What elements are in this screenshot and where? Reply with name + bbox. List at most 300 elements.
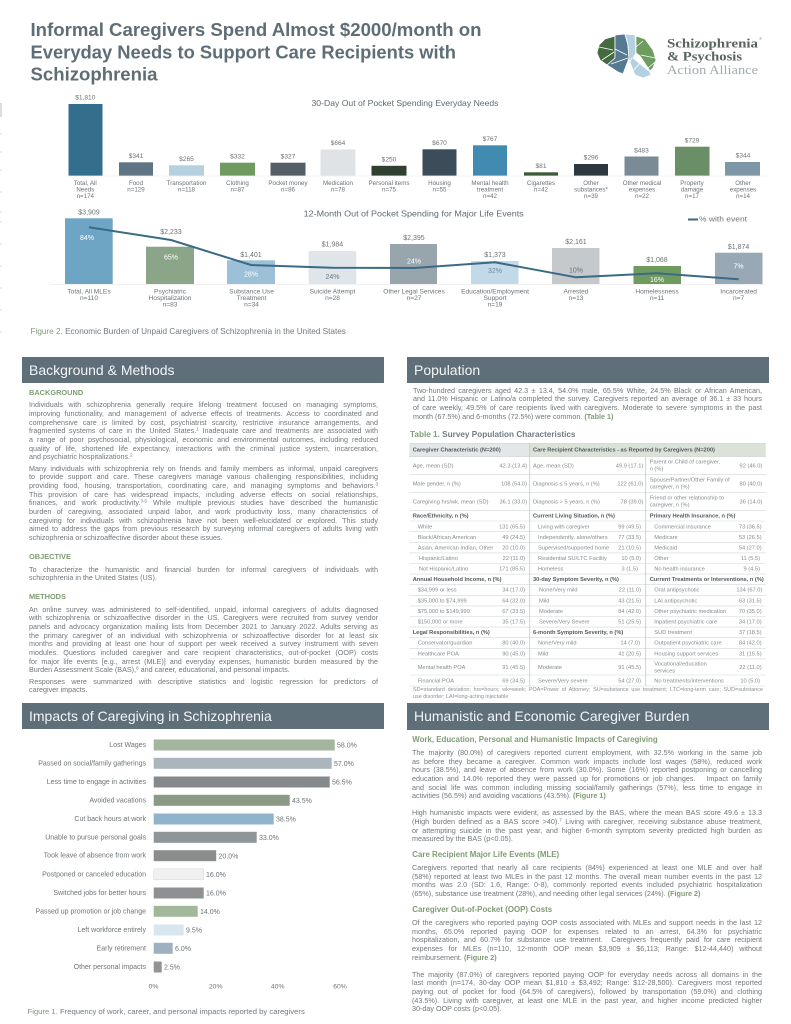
- text: OOP costs for everyday needs: [412, 970, 762, 1013]
- table column: relationship, insurance and treatments: caregiver, n (%): [650, 502, 690, 508]
- bar chart: 30-day out of pocket spending: $341: [129, 153, 144, 160]
- table column: relationship, insurance and treatments: 37 (18.5): [739, 630, 762, 636]
- table column: relationship, insurance and treatments: 80 (40.0): [740, 482, 762, 488]
- table column: relationship, insurance and treatments: Parent or Child of caregiver,: [650, 460, 721, 466]
- bar chart: 30-day out of pocket spending: $327: [281, 154, 296, 160]
- text: objective: schizophrenia in the United States (US).: [29, 573, 157, 582]
- text: population summary: of care weekly, 49.5% of care recipients lived with caregivers. Moderate to severe symptoms in the past: [413, 403, 762, 412]
- table column: caregiver characteristics: 35 (17.5): [502, 619, 525, 625]
- bar chart: 30-day out of pocket spending: Medication: [323, 180, 354, 187]
- text: OOP costs for everyday needs: last month (n=174, 30-day OOP mean $1,810 ± $3,492; Range: $12-28,500). Caregivers most reported: [412, 978, 762, 987]
- table column: care recipient characteristics: 30-day Symptom Severity, n (%): [533, 577, 619, 583]
- text: humanistic impacts: or attempting suicide in the past year, and higher 6-month symptom severity predicted high burden as: [412, 826, 762, 835]
- table column: care recipient characteristics: 10 (5.0): [621, 556, 641, 562]
- text: methods paragraph 1: An online survey was administered to self-identified, unpaid, informal caregivers of adults diagnosed: [29, 605, 378, 614]
- text: population summary: month (67.5%) and 6-months (72.5%) were common. (Table 1): [413, 412, 613, 421]
- bar chart: 30-day out of pocket spending: $670: [432, 140, 447, 147]
- text: methods paragraph 1: [29, 605, 378, 674]
- combo chart: 12-month out of pocket spending: 32%: [488, 268, 502, 275]
- text: population summary: and 11.0% Hispanic or Latino/a completed the survey. Caregivers reported an average of 36.1 ± 33 hours: [413, 394, 762, 403]
- bar chart: impacts of caregiving: 14.0%: [200, 909, 220, 916]
- table column: relationship, insurance and treatments: Outpatient psychiatric care: [654, 641, 722, 647]
- table column: care recipient characteristics: Residential SU/LTC Facility: [538, 556, 607, 562]
- table column: caregiver characteristics: 90 (45.0): [502, 651, 525, 657]
- table column: relationship, insurance and treatments: Vocational/education: [654, 662, 707, 668]
- heading: care recipient major life events: Care Recipient Major Life Events (MLE): [412, 850, 559, 859]
- combo chart: 12-month out of pocket spending: [50, 208, 765, 309]
- table column: caregiver characteristics: 131 (65.5): [499, 524, 525, 530]
- text: OOP costs for everyday needs: The majority (87.0%) of caregivers reported paying OOP for everyday needs across all domains in the: [412, 970, 762, 979]
- bar chart: 30-day out of pocket spending: n=75: [382, 187, 397, 194]
- combo chart: 12-month out of pocket spending: $3,909: [78, 210, 100, 216]
- chart title: 12-Month Out of Pocket Spending for Major Life Events: [304, 208, 524, 218]
- bar chart: impacts of caregiving: Lost Wages: [109, 742, 146, 749]
- text: humanistic impacts: measured by the BAS (p<0.05).: [412, 834, 513, 843]
- bar chart: impacts of caregiving: Avoided vacations: [89, 797, 146, 804]
- combo chart: 12-month out of pocket spending: Treatment: [237, 295, 267, 302]
- bar chart: 30-day out of pocket spending: Pocket money: [268, 180, 309, 187]
- table column: care recipient characteristics: Moderate: [539, 609, 563, 615]
- table column: care recipient characteristics: Diagnosis ≤ 5 years, n (%): [533, 482, 600, 488]
- bar chart: 30-day out of pocket spending: Other: [583, 180, 599, 187]
- bar chart: impacts of caregiving: Passed on social/family gatherings: [38, 760, 146, 767]
- table column: caregiver characteristics: 42.3 (13.4): [499, 464, 527, 470]
- panel heading: Impacts of Caregiving: Impacts of Caregiving in Schizophrenia: [29, 708, 272, 724]
- bar chart: 30-day out of pocket spending: n=17: [685, 193, 700, 200]
- table column: care recipient characteristics: Severe/Very Severe: [539, 619, 590, 625]
- table column: relationship, insurance and treatments: 54 (27.0): [739, 545, 762, 551]
- logo: Schizophrenia & Psychosis Action Alliance: Action Alliance: [667, 62, 758, 77]
- legend: [688, 214, 747, 224]
- table column: caregiver characteristics: $75,000 to $149,999: [418, 609, 470, 615]
- bar chart: 30-day out of pocket spending: damage: [681, 187, 704, 194]
- bar chart: 30-day out of pocket spending: Total, All: [74, 180, 97, 187]
- text: humanistic impacts: [412, 808, 762, 843]
- table column: caregiver characteristics: Legal Responsibilities, n (%): [413, 630, 490, 636]
- table column: relationship, insurance and treatments: 134 (67.0): [736, 588, 762, 594]
- text: work impacts: and social life was common including missing social/family gatherings (57%), less time to engage in: [412, 783, 762, 792]
- table column: caregiver characteristics: 80 (40.0): [502, 641, 525, 647]
- combo chart: 12-month out of pocket spending: Education/Employment: [461, 288, 529, 295]
- bar chart: 30-day out of pocket spending: $767: [483, 136, 498, 143]
- combo chart: 12-month out of pocket spending: $1,373: [484, 252, 506, 259]
- table column: relationship, insurance and treatments: 53 (26.5): [739, 535, 762, 541]
- bar chart: impacts of caregiving: 6.0%: [175, 946, 191, 953]
- bar chart: impacts of caregiving: 57.0%: [334, 761, 354, 768]
- bar chart: impacts of caregiving: Left workforce entirely: [78, 927, 146, 934]
- table column: caregiver characteristics: 36.1 (33.0): [499, 499, 527, 505]
- combo chart: 12-month out of pocket spending: Substance Use: [229, 288, 274, 295]
- table column: relationship, insurance and treatments: caregiver, n (%): [650, 484, 690, 490]
- bar chart: 30-day out of pocket spending: $729: [685, 138, 700, 144]
- bar chart: 30-day out of pocket spending: n=129: [127, 187, 145, 194]
- text: background paragraph 1: Individuals with schizophrenia generally require lifelong treatment focused on managing symptoms,: [29, 400, 378, 409]
- text: objective: To characterize the humanistic and financial burden for informal caregivers of individuals with: [29, 565, 378, 574]
- text: background paragraph 2: burden of caregiving, associated unpaid labor, and work productivity loss, many characteristics of: [29, 507, 378, 516]
- table column: care recipient characteristics: 78 (39.0): [621, 499, 643, 505]
- text: background paragraph 2: schizophrenia or schizoaffective disorder about these issues.: [29, 533, 223, 542]
- text: methods paragraph 1: months and providing at least one hour of support per week received a survey instrument with seven: [29, 639, 378, 648]
- text: background paragraph 1: and psychiatric hospitalizations.2: [29, 452, 133, 461]
- table column: relationship, insurance and treatments: 84 (42.0): [739, 641, 762, 647]
- text: methods paragraph 1: the primary caregiver of an individual with schizophrenia or schizoaffective disorder for at least six: [29, 631, 378, 640]
- bar chart: impacts of caregiving: [35, 740, 357, 990]
- heading: background: BACKGROUND: [29, 388, 83, 396]
- bar chart: impacts of caregiving: Took leave of absence from work: [44, 853, 146, 860]
- bar chart: impacts of caregiving: 16.0%: [206, 872, 226, 879]
- combo chart: 12-month out of pocket spending: n=110: [80, 295, 98, 302]
- table column: relationship, insurance and treatments: No treatments/interventions: [654, 678, 724, 684]
- bar chart: 30-day out of pocket spending: Food: [129, 180, 144, 187]
- text: major life events: (65%), substance use treatment (28%), and needing other legal services (24%). (Figure 2): [412, 889, 700, 898]
- table column: care recipient characteristics: None/Very mild: [538, 641, 577, 647]
- text: background paragraph 2: Many individuals with schizophrenia rely on friends and family members as informal, unpaid caregivers: [29, 464, 378, 473]
- table column: caregiver characteristics: 67 (33.5): [502, 609, 525, 615]
- table column: caregiver characteristics: Hispanic/Latino: [419, 556, 458, 562]
- bar chart: 30-day out of pocket spending: $250: [382, 156, 397, 164]
- text: work impacts: as before they became a caregiver. Common work impacts include lost wages (58%), reduced work: [412, 757, 762, 766]
- table column: relationship, insurance and treatments: 10 (5.0): [740, 678, 760, 684]
- text: background paragraph 2: This provision of care has widespread impacts, including adverse effects on social relationships,: [29, 490, 378, 499]
- combo chart: 12-month out of pocket spending: Arrested: [564, 288, 589, 295]
- table column: caregiver characteristics: 64 (32.0): [502, 598, 525, 604]
- combo chart: 12-month out of pocket spending: $1,068: [646, 257, 668, 264]
- bar chart: 30-day out of pocket spending: $265: [179, 156, 194, 163]
- text: major life events: (58%) reported at least two MLEs in the past 12 months. The overall mean number events in the past 12: [412, 872, 762, 881]
- text: OOP costs for MLEs: [412, 918, 762, 962]
- table column: care recipient characteristics: Mild: [539, 598, 549, 604]
- table column: relationship, insurance and treatments: 70 (35.0): [739, 609, 762, 615]
- bar chart: 30-day out of pocket spending: n=86: [281, 187, 296, 194]
- table column: caregiver characteristics: Race/Ethnicity, n (%): [413, 514, 469, 520]
- text: population summary: Two-hundred caregivers aged 42.3 ± 13.4, 54.0% male, 65.5% White, 24.5% Black or African American,: [413, 386, 762, 395]
- table column: relationship, insurance and treatments: [650, 460, 764, 684]
- table column: caregiver characteristics: Financial POA: [418, 678, 454, 684]
- table column: care recipient characteristics: Moderate: [538, 665, 562, 671]
- table column: caregiver characteristics: $150,000 or more: [418, 619, 463, 625]
- table column: care recipient characteristics: 43 (21.5): [618, 598, 641, 604]
- text: OOP costs for MLEs: reimbursement. (Figure 2): [412, 953, 497, 962]
- logo: Schizophrenia & Psychosis Action Alliance: & Psychosis: [667, 49, 742, 64]
- axis labels: 0%: [149, 984, 158, 990]
- combo chart: 12-month out of pocket spending: n=34: [244, 302, 259, 309]
- bar chart: 30-day out of pocket spending: $344: [736, 152, 751, 160]
- combo chart: 12-month out of pocket spending: n=13: [569, 295, 584, 302]
- table footnote: [413, 687, 763, 700]
- bar chart: impacts of caregiving: Switched jobs for better hours: [53, 890, 146, 897]
- table column: relationship, insurance and treatments: Friend or other relationship to: [650, 495, 724, 501]
- table column: relationship, insurance and treatments: SUD treatment: [654, 630, 692, 636]
- bar chart: impacts of caregiving: 38.5%: [276, 816, 296, 824]
- axis labels: [149, 984, 347, 990]
- bar chart: 30-day out of pocket spending: $296: [584, 154, 599, 162]
- table column: caregiver characteristics: Healthcare POA: [418, 651, 459, 657]
- combo chart: 12-month out of pocket spending: n=11: [650, 295, 665, 302]
- table column: relationship, insurance and treatments: Current Treatments or Interventions, n (%): [650, 577, 764, 583]
- bar chart: 30-day out of pocket spending: Clothing: [226, 180, 249, 187]
- combo chart: 12-month out of pocket spending: Homelessness: [635, 288, 679, 295]
- table column: caregiver characteristics: 171 (85.5): [499, 566, 525, 572]
- bar chart: impacts of caregiving: Postponed or canceled education: [42, 871, 146, 878]
- text: major life events: Caregivers reported that nearly all care recipients (84%) experienced at least one MLE and over half: [412, 863, 762, 872]
- bar chart: 30-day out of pocket spending: $1,810: [75, 94, 96, 102]
- table column: care recipient characteristics: Independently, alone/others: [538, 535, 608, 541]
- table column: care recipient characteristics: Supervised/supported home: [538, 545, 609, 551]
- table column: caregiver characteristics: Male gender, n (%): [413, 482, 461, 488]
- text: background paragraph 1: [29, 400, 378, 461]
- combo chart: 12-month out of pocket spending: 7%: [734, 264, 744, 270]
- text: methods paragraph 1: with schizophrenia or schizoaffective disorder in the US. Caregivers were recruited from survey vendor: [29, 613, 378, 622]
- table column: relationship, insurance and treatments: No health insurance: [654, 566, 705, 572]
- panel heading: Population: Population: [414, 362, 480, 378]
- bar chart: 30-day out of pocket spending: n=174: [77, 193, 95, 200]
- text: objective: [29, 565, 378, 582]
- table column: care recipient characteristics: Mild: [538, 651, 548, 657]
- table column: relationship, insurance and treatments: Other: [654, 556, 669, 562]
- table column: relationship, insurance and treatments: Medicare: [654, 535, 678, 541]
- combo chart: 12-month out of pocket spending: 24%: [407, 258, 421, 266]
- table column: care recipient characteristics: 14 (7.0): [620, 641, 640, 647]
- combo chart: 12-month out of pocket spending: n=27: [407, 295, 422, 302]
- table: survey population characteristics: [409, 443, 766, 686]
- table column: caregiver characteristics: Black/African American: [418, 535, 476, 541]
- panel heading: Humanistic and Economic Caregiver Burden: Humanistic and Economic Caregiver Burden: [414, 708, 689, 724]
- bar chart: 30-day out of pocket spending: Needs: [76, 187, 94, 194]
- text: work impacts: hours (38.5%), and leave of absence from work (30.0%). Some (16%) reported postponing or cancelling: [412, 765, 762, 774]
- printer crop ticks: [0, 103, 2, 332]
- table column: care recipient characteristics: 54 (27.0): [618, 678, 641, 684]
- chart title: 30-Day Out of Pocket Spending Everyday Needs: [312, 98, 498, 108]
- table column: care recipient characteristics: Living with caregiver: [538, 524, 590, 530]
- bar chart: impacts of caregiving: 16.0%: [206, 890, 226, 898]
- text: methods paragraph 1: modules. Questions included caregiver and care recipient characteristics, out-of-pocket (OOP) costs: [29, 648, 378, 657]
- panel heading: Background & Methods: Background & Methods: [29, 362, 175, 378]
- combo chart: 12-month out of pocket spending: Suicide Attempt: [310, 288, 356, 295]
- bar chart: 30-day out of pocket spending: substances*: [574, 187, 608, 194]
- combo chart: 12-month out of pocket spending: 16%: [650, 277, 664, 284]
- bar chart: 30-day out of pocket spending: Mental health: [471, 180, 509, 187]
- bar chart: 30-day out of pocket spending: treatment: [477, 187, 503, 194]
- combo chart: 12-month out of pocket spending: n=83: [163, 302, 178, 309]
- text: work impacts: The majority (80.0%) of caregivers reported current employment, with 32.5% working in the same job: [412, 748, 762, 757]
- table column: care recipient characteristics: Age, mean (SD): [533, 464, 574, 470]
- bar chart: 30-day out of pocket spending: Property: [680, 180, 705, 187]
- table column: relationship, insurance and treatments: Spouse/Partner/Other Family of: [650, 478, 730, 484]
- text: OOP costs for everyday needs: (43.5%). Living with caregiver, at least one MLE in the past year, and higher income predicted higher: [412, 996, 762, 1005]
- bar chart: 30-day out of pocket spending: Other medical: [623, 180, 661, 187]
- line: % with event: [89, 227, 739, 279]
- table title: Table 1. Survey Population Characteristics: [410, 430, 575, 439]
- title: Everyday Needs to Support Care Recipients with: [30, 41, 456, 62]
- table column: caregiver characteristics: 108 (54.0): [501, 482, 527, 488]
- table column: care recipient characteristics: None/Very mild: [539, 588, 578, 594]
- bar chart: 30-day out of pocket spending: n=42: [534, 187, 549, 194]
- table column: care recipient characteristics: 77 (33.5): [618, 535, 641, 541]
- combo chart: 12-month out of pocket spending: 28%: [244, 272, 258, 278]
- table column: relationship, insurance and treatments: Commercial insurance: [654, 524, 711, 530]
- text: background paragraph 2: finances, and work productivity.3-5 While multiple previous studies have described the humanistic: [29, 498, 378, 507]
- bar chart: impacts of caregiving: 2.5%: [164, 964, 180, 972]
- bar chart: 30-day out of pocket spending: n=14: [736, 193, 751, 200]
- bar chart: 30-day out of pocket spending: $81: [535, 163, 547, 170]
- bar chart: impacts of caregiving: 33.0%: [259, 835, 279, 842]
- bar chart: 30-day out of pocket spending: n=55: [433, 187, 447, 194]
- bar chart: impacts of caregiving: Early retirement: [97, 945, 146, 952]
- bar chart: impacts of caregiving: Less time to engage in activities: [47, 779, 146, 786]
- text: methods paragraph 1: Burden Assessment Scale (BAS),6 and career, educational, and personal impacts.: [29, 665, 290, 674]
- text: OOP costs for MLEs: Of the caregivers who reported paying OOP costs associated with MLEs and support needs in the last 12: [412, 918, 762, 927]
- table column: caregiver characteristics: $34,999 or less: [418, 588, 457, 594]
- table column: care recipient characteristics: 3 (1.5): [622, 566, 638, 572]
- table column: caregiver characteristics: White: [418, 524, 432, 530]
- text: work impacts: [412, 748, 762, 800]
- panel heading: Impacts of Caregiving: [22, 703, 384, 729]
- combo chart: 12-month out of pocket spending: n=19: [488, 302, 503, 309]
- bar chart: impacts of caregiving: 43.5%: [292, 798, 312, 805]
- table column: care recipient characteristics: [533, 447, 715, 684]
- table column: relationship, insurance and treatments: 36 (14.0): [740, 499, 762, 505]
- table column: care recipient characteristics: 51 (25.5): [618, 619, 641, 625]
- text: methods paragraph 2: caregiver impacts.: [29, 685, 87, 694]
- table column: relationship, insurance and treatments: Other psychiatric medication: [654, 609, 726, 615]
- bar chart: 30-day out of pocket spending: [68, 94, 767, 200]
- bar chart: 30-day out of pocket spending: expenses: [730, 187, 756, 194]
- combo chart: 12-month out of pocket spending: Psychiatric: [154, 288, 187, 295]
- bar chart: 30-day out of pocket spending: Personal items: [369, 180, 409, 187]
- table column: care recipient characteristics: 6-month Symptom Severity, n (%): [533, 630, 623, 636]
- text: background paragraph 1: comprehensive care is limited by cost, psychiatrist scarcity, restrictive insurance arrangements, and: [29, 418, 378, 427]
- text: background paragraph 1: improving functionality, and management of adverse effects of treatments. Access to coordinated and: [29, 409, 378, 418]
- title: Schizophrenia: [30, 64, 158, 84]
- text: background paragraph 1: fragmented systems of care in the United States.1 Inadequate care and treatments are associated with: [29, 426, 378, 435]
- text: methods paragraph 2: [29, 677, 378, 694]
- table column: care recipient characteristics: Severe/Very severe: [538, 678, 588, 684]
- bar chart: impacts of caregiving: 58.0%: [337, 742, 357, 750]
- combo chart: 12-month out of pocket spending: $1,874: [728, 244, 749, 251]
- axis labels: 20%: [209, 984, 223, 990]
- logo: Schizophrenia & Psychosis Action Alliance: ®: [759, 36, 762, 41]
- text: population summary: [413, 386, 762, 421]
- text: methods paragraph 1: panels and advocacy organization mailing lists from December 2021 to January 2022. Adults serving as: [29, 622, 378, 631]
- panel heading: Background & Methods: [22, 357, 384, 383]
- table column: caregiver characteristics: Annual Household Income, n (%): [413, 577, 502, 583]
- bar chart: impacts of caregiving: 56.5%: [332, 780, 352, 786]
- axis labels: 40%: [271, 984, 285, 990]
- bar chart: 30-day out of pocket spending: Cigarettes: [527, 180, 555, 187]
- combo chart: 12-month out of pocket spending: Other Legal Services: [383, 288, 445, 295]
- panel heading: Humanistic and Economic Caregiver Burden: [407, 703, 769, 730]
- combo chart: 12-month out of pocket spending: $2,395: [403, 235, 425, 242]
- text: background paragraph 2: providing food, housing, transportation, coordinating care, and managing symptoms and behaviors.3: [29, 481, 378, 490]
- text: humanistic impacts: (High burden defined as a BAS score >40).7 Living with caregiver, receiving substance abuse treatment,: [412, 817, 762, 826]
- heading: work, education, personal impacts: Work, Education, Personal and Humanistic Impacts of Caregiving: [412, 734, 658, 744]
- table column: care recipient characteristics: 41 (20.5): [618, 651, 641, 657]
- text: OOP costs for MLEs: months, 65.0% reported paying OOP for expenses related to an arrest, 64.3% for psychiatric: [412, 927, 762, 936]
- bar chart: 30-day out of pocket spending: Transportation: [167, 180, 207, 187]
- table column: caregiver characteristics: Conservator/guardian: [418, 641, 472, 647]
- text: major life events: months was 2.0 (SD: 1.6, Range: 0-8), commonly reported events included psychiatric hospitalization: [412, 880, 762, 889]
- table column: caregiver characteristics: 91 (45.5): [502, 665, 525, 671]
- table column: caregiver characteristics: 20 (10.0): [502, 545, 525, 551]
- combo chart: 12-month out of pocket spending: Hospitalization: [149, 295, 192, 302]
- legend: % with event: [699, 214, 747, 224]
- table column: relationship, insurance and treatments: Oral antipsychotic: [654, 588, 700, 594]
- table column: care recipient characteristics: 84 (42.0): [618, 609, 641, 615]
- text: OOP costs for MLEs: expenses for MLEs (n=110, 12-month OOP mean $3,909 ± $6,113; Range: $12-44,440) without: [412, 944, 762, 953]
- text: OOP costs for MLEs: hospitalization, and 60.7% for substance use treatment. Caregivers frequently paid for care recipient: [412, 935, 762, 944]
- table column: caregiver characteristics: Not Hispanic/Latino: [419, 566, 468, 572]
- table column: relationship, insurance and treatments: Housing support services: [654, 651, 718, 657]
- table column: caregiver characteristics: Caregiver Characteristic (N=200): [413, 447, 501, 453]
- bar chart: 30-day out of pocket spending: n=78: [331, 187, 346, 194]
- table column: care recipient characteristics: Current Living Situation, n (%): [533, 514, 615, 520]
- text: background paragraph 2: caregiving for individuals with schizophrenia have not been well-elucidated or explored. This study: [29, 516, 378, 525]
- bar chart: 30-day out of pocket spending: n=87: [231, 187, 245, 194]
- combo chart: 12-month out of pocket spending: $2,233: [160, 229, 182, 236]
- table column: caregiver characteristics: Mental health POA: [418, 665, 466, 671]
- combo chart: 12-month out of pocket spending: n=7: [733, 295, 745, 302]
- table column: care recipient characteristics: Diagnosis > 5 years, n (%): [533, 499, 600, 505]
- table column: caregiver characteristics: 49 (24.5): [502, 535, 525, 541]
- table column: relationship, insurance and treatments: 34 (17.0): [739, 619, 762, 625]
- table column: relationship, insurance and treatments: 63 (31.5): [739, 598, 762, 604]
- bar chart: 30-day out of pocket spending: n=22: [635, 193, 650, 200]
- bar chart: 30-day out of pocket spending: $332: [230, 154, 245, 160]
- table column: caregiver characteristics: [413, 447, 527, 684]
- bar chart: impacts of caregiving: Cut back hours at work: [74, 816, 146, 823]
- table column: relationship, insurance and treatments: 22 (11.0): [739, 665, 762, 671]
- combo chart: 12-month out of pocket spending: Total, All MLEs: [67, 288, 111, 295]
- text: major life events: [412, 863, 762, 898]
- bar chart: 30-day out of pocket spending: n=39: [584, 193, 599, 200]
- bar chart: 30-day out of pocket spending: expenses: [629, 187, 655, 194]
- title: [30, 19, 482, 84]
- table column: caregiver characteristics: 69 (34.5): [502, 678, 525, 684]
- table column: caregiver characteristics: 22 (11.0): [503, 556, 525, 562]
- table column: relationship, insurance and treatments: 31 (15.5): [739, 651, 762, 657]
- bar chart: impacts of caregiving: 20.0%: [218, 854, 238, 860]
- bar chart: impacts of caregiving: Unable to pursue personal goals: [45, 834, 146, 841]
- text: background paragraph 2: to provide support and care. These caregivers manage various challenging responsibilities, including: [29, 472, 378, 481]
- logo: Schizophrenia & Psychosis Action Alliance: Schizophrenia: [667, 36, 759, 51]
- figure 2 caption: Figure 2. Economic Burden of Unpaid Caregivers of Schizophrenia in the United States: [30, 327, 346, 336]
- table column: caregiver characteristics: Age, mean (SD): [413, 464, 454, 470]
- combo chart: 12-month out of pocket spending: n=28: [325, 295, 340, 302]
- table column: caregiver characteristics: 34 (17.0): [502, 588, 525, 594]
- table column: care recipient characteristics: Homeless: [538, 566, 563, 572]
- panel heading: Population: [407, 357, 769, 383]
- bar chart: 30-day out of pocket spending: Other: [735, 180, 751, 187]
- combo chart: 12-month out of pocket spending: Incarcerated: [720, 288, 757, 295]
- table column: care recipient characteristics: 122 (61.0): [617, 482, 643, 488]
- table column: relationship, insurance and treatments: Inpatient psychiatric care: [654, 619, 717, 625]
- text: background paragraph 2: [29, 464, 378, 542]
- table column: care recipient characteristics: 22 (11.0): [619, 588, 641, 594]
- combo chart: 12-month out of pocket spending: Support: [483, 295, 507, 302]
- combo chart: 12-month out of pocket spending: $1,984: [322, 242, 343, 248]
- text: OOP costs for everyday needs: paying out of pocket for food (64.5% of caregivers), followed by transportation (59.0%) and clothing: [412, 987, 762, 996]
- text: background paragraph 2: aimed to address the gaps from previous research by surveying informal caregivers of adults living with: [29, 524, 378, 533]
- table footnote: use disorder; LAI=long-acting injectable: [413, 694, 508, 700]
- bar chart: 30-day out of pocket spending: $483: [634, 148, 649, 154]
- table column: relationship, insurance and treatments: 92 (46.0): [740, 464, 762, 470]
- table column: care recipient characteristics: 99 (49.5): [618, 524, 641, 530]
- table column: caregiver characteristics: Asian, American Indian, Other: [418, 545, 493, 551]
- table column: relationship, insurance and treatments: Medicaid: [654, 545, 677, 551]
- text: work impacts: activities (56.5%) and avoiding vacations (43.5%). (Figure 1): [412, 791, 606, 800]
- table column: relationship, insurance and treatments: services: [654, 668, 675, 674]
- heading: methods: METHODS: [29, 592, 66, 600]
